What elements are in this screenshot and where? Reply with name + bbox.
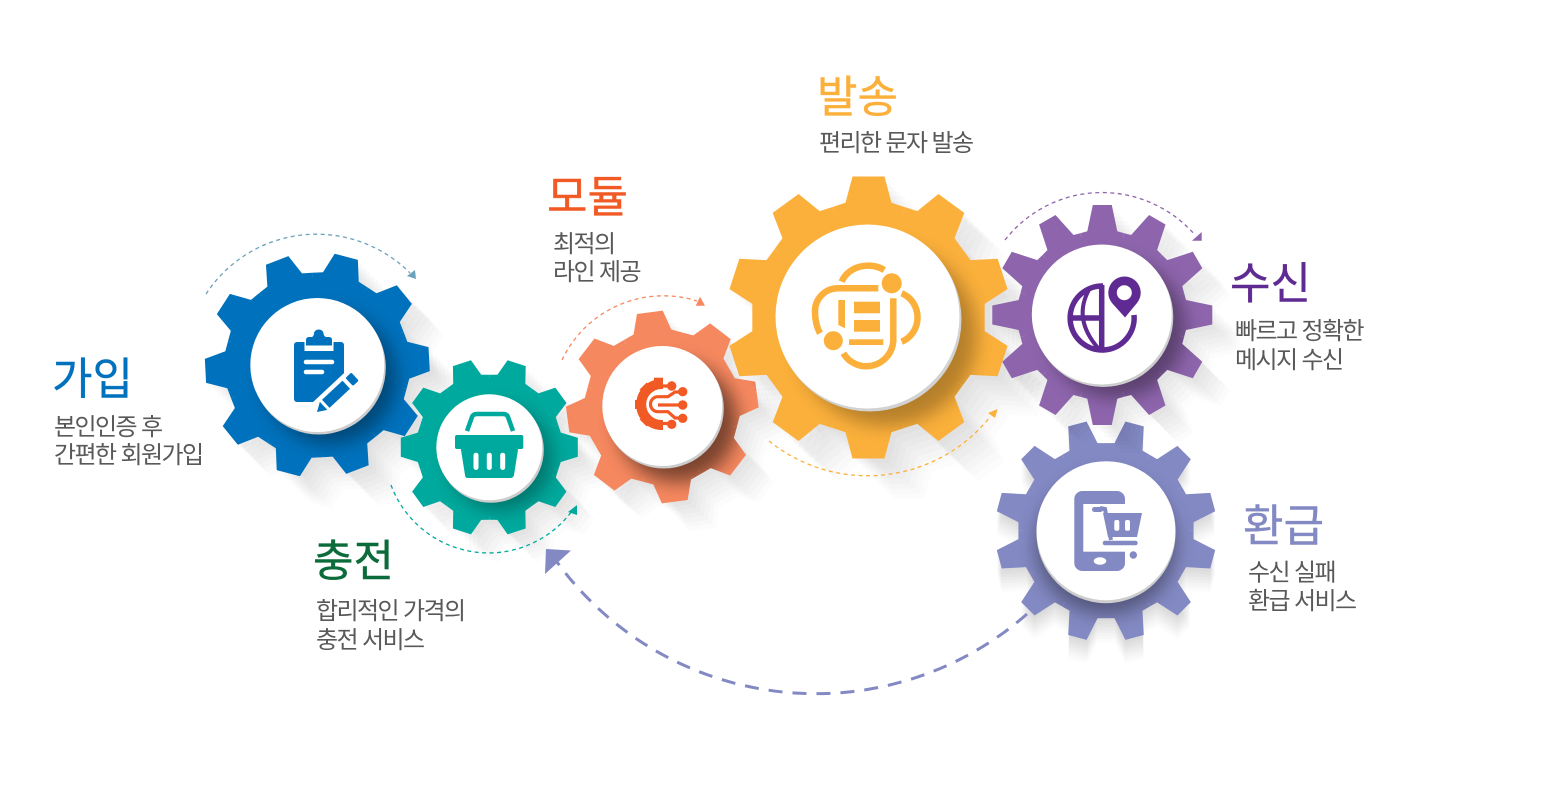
label: refund: 수신 실패 bbox=[1248, 560, 1335, 586]
label: refund bbox=[1243, 502, 1356, 615]
label: charge bbox=[313, 537, 464, 654]
label: module bbox=[547, 173, 641, 286]
icon: clipboard and pencil bbox=[294, 330, 371, 419]
icon: phone with cart bbox=[1074, 491, 1142, 571]
label: receive: 수신 bbox=[1230, 260, 1311, 308]
label: send: 편리한 문자 발송 bbox=[819, 130, 973, 157]
icon: shopping basket bbox=[455, 414, 523, 478]
gear: charge (teal) bbox=[400, 360, 598, 554]
arrow: refund return arc bbox=[545, 549, 1027, 694]
gear: send (amber) bbox=[723, 176, 1054, 498]
infographic: six-step gear process bbox=[54, 75, 1364, 696]
arrow: receive arc bbox=[1005, 193, 1202, 241]
label: send bbox=[817, 73, 973, 157]
arrow: sign-up arc bbox=[206, 234, 416, 294]
label: receive: 메시지 수신 bbox=[1235, 347, 1342, 374]
label: module: 라인 제공 bbox=[553, 259, 641, 286]
label: module: 모듈 bbox=[547, 173, 628, 222]
icon: message flow bbox=[815, 266, 918, 366]
label: sign-up: 간편한 회원가입 bbox=[54, 442, 202, 469]
label: receive bbox=[1230, 260, 1364, 374]
label: module: 최적의 bbox=[553, 231, 614, 258]
gear: refund (periwinkle) bbox=[993, 418, 1219, 667]
gear: sign-up (blue) bbox=[204, 254, 453, 500]
gear: module (orange) bbox=[566, 310, 778, 522]
label: sign-up: 본인인증 후 bbox=[54, 414, 162, 441]
icon: globe with location pin bbox=[1068, 276, 1141, 350]
label: sign-up bbox=[52, 355, 202, 469]
label: send: 발송 bbox=[817, 73, 898, 122]
label: sign-up: 가입 bbox=[52, 355, 133, 404]
label: charge: 충전 bbox=[313, 537, 394, 586]
label: refund: 환급 서비스 bbox=[1248, 588, 1356, 615]
label: receive: 빠르고 정확한 bbox=[1235, 318, 1364, 345]
label: charge: 충전 서비스 bbox=[316, 627, 424, 654]
icon: gear with circuit lines bbox=[635, 378, 687, 429]
arrow: charge arc bbox=[391, 485, 577, 553]
arrow: send arc bbox=[769, 409, 998, 476]
arrow: module arc bbox=[562, 296, 705, 360]
gear: receive (purple) bbox=[992, 205, 1240, 453]
label: charge: 합리적인 가격의 bbox=[316, 598, 464, 625]
label: refund: 환급 bbox=[1243, 502, 1324, 551]
